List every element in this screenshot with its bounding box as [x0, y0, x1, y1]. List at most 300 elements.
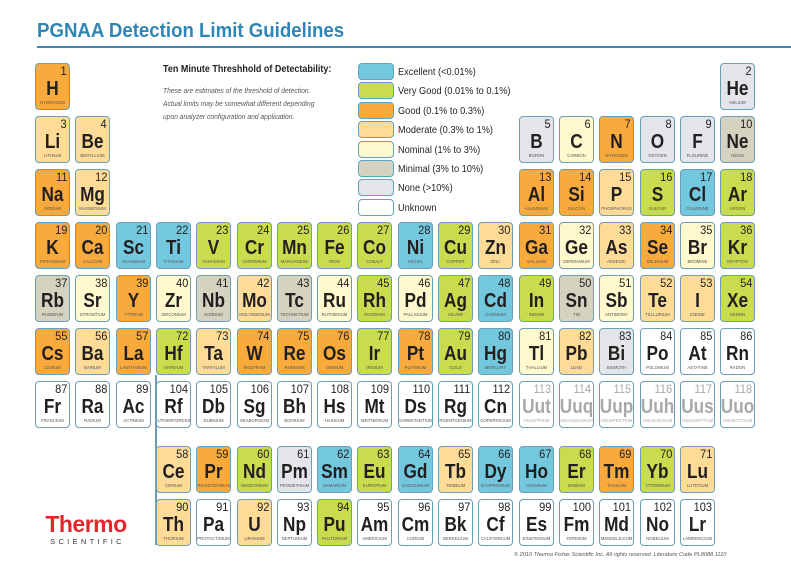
- element: Rg: ROENTGENIUM: [439, 418, 472, 423]
- element: Zn: ZINC: [490, 259, 501, 264]
- element: Ru: [317, 275, 352, 322]
- element: Md: MENDELEVIUM: [601, 536, 632, 541]
- element: Rf: Rf: [164, 396, 183, 418]
- element: Au: Au: [444, 343, 467, 365]
- element: Ac: Ac: [122, 396, 144, 418]
- element: V: [196, 222, 231, 269]
- element: Ce: [156, 446, 191, 493]
- element: Uuh: Uuh: [641, 396, 674, 418]
- element: Ds: Ds: [404, 396, 426, 418]
- element: Lr: Lr: [689, 514, 706, 536]
- element: O: O: [651, 131, 664, 153]
- element: Fr: FRANCIUM: [41, 418, 64, 423]
- element: Pt: 78: [418, 329, 430, 343]
- legend: Excellent (<0.01%): [398, 66, 476, 78]
- element: Te: 52: [660, 276, 672, 290]
- element: Cm: 96: [418, 500, 430, 514]
- element: Rn: Rn: [726, 343, 749, 365]
- element: Uuo: Uuo: [721, 396, 754, 418]
- element: Be: BERYLLIUM: [80, 153, 105, 158]
- element: Mn: MANGANESE: [281, 259, 308, 264]
- element: Ni: Ni: [407, 237, 424, 259]
- element: B: 5: [545, 117, 551, 131]
- element: In: INDIUM: [529, 312, 544, 317]
- element: B: B: [530, 131, 543, 153]
- element: Bi: 83: [619, 329, 631, 343]
- element: Si: Si: [568, 184, 585, 206]
- element: Sm: [317, 446, 352, 493]
- element: Br: 35: [700, 223, 712, 237]
- element: Es: Es: [526, 514, 547, 536]
- element: Lu: [680, 446, 715, 493]
- logo: Thermo Scientific: SCIENTIFIC: [50, 537, 125, 546]
- element: Pt: Pt: [407, 343, 424, 365]
- element: Rh: 45: [377, 276, 389, 290]
- element: H: [35, 63, 70, 110]
- element: Ga: Ga: [525, 237, 548, 259]
- element: Yb: 70: [660, 447, 672, 461]
- element: U: 92: [257, 500, 269, 514]
- element: Zr: 40: [176, 276, 188, 290]
- element: Mt: 109: [371, 382, 389, 396]
- element: Xe: 54: [740, 276, 752, 290]
- element: Si: 14: [579, 170, 591, 184]
- element: Cn: 112: [492, 382, 510, 396]
- element: Mg: MAGNESIUM: [79, 206, 106, 211]
- element: Sr: [75, 275, 110, 322]
- element: La: LANTHANUM: [120, 365, 147, 370]
- element: Hs: [317, 381, 352, 428]
- element: Sg: 106: [251, 382, 269, 396]
- element: Os: OSMIUM: [326, 365, 343, 370]
- element: Ni: [398, 222, 433, 269]
- element: Uus: 117: [694, 382, 712, 396]
- element: Gd: 64: [418, 447, 430, 461]
- element: Y: YTTRIUM: [124, 312, 143, 317]
- legend: [358, 63, 510, 216]
- element: Uup: [599, 381, 634, 428]
- element: Bh: Bh: [283, 396, 306, 418]
- element: Al: [519, 169, 554, 216]
- element: Ho: HOLMIUM: [526, 483, 547, 488]
- element: Uuo: UNUNOCTIUM: [723, 418, 752, 423]
- element: Am: [357, 499, 392, 546]
- element: Rh: Rh: [363, 290, 386, 312]
- element: Cm: CURIUM: [407, 536, 424, 541]
- legend heading: Ten Minute Threshhold of Detectability:: [163, 64, 331, 75]
- element: Es: [519, 499, 554, 546]
- element: Uuh: UNUNHEXIUM: [643, 418, 672, 423]
- element: Er: Er: [567, 461, 586, 483]
- element: Bh: [277, 381, 312, 428]
- element: Yb: Yb: [647, 461, 668, 483]
- element: Nd: Nd: [243, 461, 266, 483]
- element: Eu: [357, 446, 392, 493]
- element: Si: [559, 169, 594, 216]
- element: Be: Be: [81, 131, 103, 153]
- element: Ag: [438, 275, 473, 322]
- element: Tm: THULIUM: [607, 483, 626, 488]
- element: Tl: 81: [539, 329, 551, 343]
- element: La: La: [123, 343, 144, 365]
- element: Co: 27: [377, 223, 389, 237]
- element: Eu: Eu: [364, 461, 385, 483]
- element: Cr: [237, 222, 272, 269]
- element: Au: GOLD: [449, 365, 462, 370]
- element: Cm: Cm: [402, 514, 429, 536]
- element: Bk: Bk: [444, 514, 466, 536]
- element: Ds: DARMSTADTIUM: [398, 418, 433, 423]
- element: Sc: Sc: [123, 237, 144, 259]
- element: Be: 4: [101, 117, 107, 131]
- element: He: He: [726, 78, 748, 100]
- element: K: POTASSIUM: [40, 259, 65, 264]
- element: Nd: NEODYMIUM: [241, 483, 268, 488]
- element: Sc: 21: [136, 223, 148, 237]
- element: At: At: [688, 343, 707, 365]
- element: Ru: RUTHENIUM: [322, 312, 347, 317]
- element: Fe: IRON: [329, 259, 340, 264]
- element: Rh: [357, 275, 392, 322]
- element: Kr: KRYPTON: [727, 259, 748, 264]
- element: Pd: 46: [418, 276, 430, 290]
- element: Np: NEPTUNIUM: [282, 536, 307, 541]
- element: W: [237, 328, 272, 375]
- element: Sc: [116, 222, 151, 269]
- element: Cs: Cs: [41, 343, 63, 365]
- element: Pb: LEAD: [571, 365, 582, 370]
- element: Es: EINSTEINIUM: [523, 536, 550, 541]
- element: Tb: Tb: [445, 461, 466, 483]
- element: S: [640, 169, 675, 216]
- element: Ga: [519, 222, 554, 269]
- element: Pd: PALLADIUM: [403, 312, 428, 317]
- element: U: U: [248, 514, 261, 536]
- element: O: OXYGEN: [648, 153, 667, 158]
- element: Gd: [398, 446, 433, 493]
- element: P: 15: [619, 170, 631, 184]
- legend: Moderate (0.3% to 1%): [398, 124, 493, 136]
- element: Ac: ACTINIUM: [123, 418, 144, 423]
- element: Cf: 98: [498, 500, 510, 514]
- element: Hg: [478, 328, 513, 375]
- element: V: V: [208, 237, 219, 259]
- element: Er: ERBIUM: [568, 483, 585, 488]
- element: Pa: Pa: [203, 514, 224, 536]
- element: La: 57: [136, 329, 148, 343]
- element: Uup: UNUNPENTIUM: [601, 418, 632, 423]
- element: K: K: [46, 237, 59, 259]
- element: N: [599, 116, 634, 163]
- element: Ba: 56: [95, 329, 107, 343]
- element: Np: [277, 499, 312, 546]
- element: Hf: HAFNIUM: [164, 365, 183, 370]
- element: Rg: Rg: [444, 396, 467, 418]
- element: No: [640, 499, 675, 546]
- element: Mt: MEITNERIUM: [361, 418, 388, 423]
- element: Bh: BOHRIUM: [284, 418, 305, 423]
- element: Li: [35, 116, 70, 163]
- element: Se: SELENIUM: [647, 259, 668, 264]
- element: Pb: Pb: [566, 343, 587, 365]
- element: Am: 95: [377, 500, 389, 514]
- element: Am: AMERICIUM: [362, 536, 387, 541]
- title: PGNAA Detection Limit Guidelines: [37, 19, 344, 42]
- element: Ar: [720, 169, 755, 216]
- legend: Unknown: [398, 202, 437, 214]
- element: Cn: Cn: [484, 396, 507, 418]
- element: Hg: 80: [498, 329, 510, 343]
- element: Ca: 20: [95, 223, 107, 237]
- element: Al: ALUMINUM: [525, 206, 548, 211]
- element: S: S: [652, 184, 663, 206]
- element: V: 23: [216, 223, 228, 237]
- element: U: [237, 499, 272, 546]
- element: Bi: [599, 328, 634, 375]
- element: Cm: [398, 499, 433, 546]
- element: Hg: MERCURY: [485, 365, 506, 370]
- element: P: PHOSPHORUS: [601, 206, 632, 211]
- element: Eu: EUROPIUM: [363, 483, 386, 488]
- element: Pm: PROMETHIUM: [280, 483, 309, 488]
- element: O: 8: [666, 117, 672, 131]
- note text: These are estimates of the threshold of detection.: [163, 86, 310, 95]
- element: Li: 3: [61, 117, 67, 131]
- element: I: I: [695, 290, 700, 312]
- element: Fe: 26: [337, 223, 349, 237]
- element: Sb: Sb: [606, 290, 627, 312]
- element: U: URANIUM: [244, 536, 265, 541]
- element: Nb: 41: [216, 276, 228, 290]
- legend: Minimal (3% to 10%): [398, 163, 483, 175]
- element: Md: [599, 499, 634, 546]
- element: Lr: LAWRENCIUM: [683, 536, 712, 541]
- element: Nb: [196, 275, 231, 322]
- element: Tl: [519, 328, 554, 375]
- element: Ni: 28: [418, 223, 430, 237]
- element: Sm: Sm: [321, 461, 348, 483]
- divider line f-block: [155, 375, 156, 545]
- element: Au: 79: [458, 329, 470, 343]
- element: Ar: ARGON: [730, 206, 745, 211]
- element: Sg: Sg: [244, 396, 265, 418]
- element: Pu: 94: [337, 500, 349, 514]
- element: Uut: UNUNTRIUM: [523, 418, 550, 423]
- element: C: [559, 116, 594, 163]
- element: Ba: [75, 328, 110, 375]
- element: I: 53: [700, 276, 712, 290]
- element: Hf: 72: [176, 329, 188, 343]
- element: Sb: [599, 275, 634, 322]
- element: Pb: 82: [579, 329, 591, 343]
- element: Hs: HASSIUM: [325, 418, 344, 423]
- element: Mg: 12: [95, 170, 107, 184]
- element: Ag: SILVER: [448, 312, 463, 317]
- element: N: N: [610, 131, 623, 153]
- element: Co: COBALT: [366, 259, 383, 264]
- element: Fr: 87: [55, 382, 67, 396]
- element: Th: THORIUM: [163, 536, 184, 541]
- element: Uus: [680, 381, 715, 428]
- element: Y: Y: [128, 290, 139, 312]
- element: Ne: 10: [740, 117, 752, 131]
- element: Uut: [519, 381, 554, 428]
- element: In: [519, 275, 554, 322]
- element: Y: 39: [136, 276, 148, 290]
- element: Uuq: 114: [573, 382, 591, 396]
- element: Pu: Pu: [324, 514, 345, 536]
- element: Zn: 30: [498, 223, 510, 237]
- element: Rg: [438, 381, 473, 428]
- element: Ne: NEON: [731, 153, 744, 158]
- element: Mg: [75, 169, 110, 216]
- element: Db: 105: [210, 382, 228, 396]
- element: Np: 93: [297, 500, 309, 514]
- element: Th: [156, 499, 191, 546]
- element: He: HELIUM: [729, 100, 746, 105]
- element: Te: [640, 275, 675, 322]
- element: Zn: [478, 222, 513, 269]
- element: Ho: [519, 446, 554, 493]
- element: Cs: 55: [55, 329, 67, 343]
- element: Mn: [277, 222, 312, 269]
- element: Li: Li: [45, 131, 60, 153]
- element: Ir: IRIDIUM: [366, 365, 383, 370]
- element: Ra: Ra: [81, 396, 103, 418]
- element: Ag: 47: [458, 276, 470, 290]
- element: Fm: [559, 499, 594, 546]
- element: Kr: 36: [740, 223, 752, 237]
- element: Ca: CALCIUM: [83, 259, 102, 264]
- element: Kr: Kr: [728, 237, 747, 259]
- element: Po: 84: [660, 329, 672, 343]
- element: Pt: PLATINUM: [405, 365, 426, 370]
- element: W: 74: [257, 329, 269, 343]
- element: Mn: Mn: [282, 237, 307, 259]
- element: Mo: MOLYBDENUM: [239, 312, 270, 317]
- element: Pr: 59: [216, 447, 228, 461]
- element: Nb: Nb: [202, 290, 225, 312]
- element: Cd: CADMIUM: [485, 312, 506, 317]
- element: Es: 99: [539, 500, 551, 514]
- element: Pd: [398, 275, 433, 322]
- element: Fe: [317, 222, 352, 269]
- element: Sn: Sn: [566, 290, 587, 312]
- element: Rb: 37: [55, 276, 67, 290]
- element: Yb: [640, 446, 675, 493]
- element: Np: Np: [283, 514, 306, 536]
- element: Ir: 77: [377, 329, 389, 343]
- element: Re: RHENIUM: [284, 365, 305, 370]
- element: Sr: STRONTIUM: [80, 312, 105, 317]
- element: Ca: [75, 222, 110, 269]
- element: Mg: Mg: [80, 184, 105, 206]
- element: Fr: Fr: [44, 396, 61, 418]
- element: At: ASTATINE: [687, 365, 708, 370]
- element: Uus: Uus: [681, 396, 714, 418]
- element: N: 7: [625, 117, 631, 131]
- note text: [162, 86, 314, 121]
- element: Pa: PROTACTINIUM: [197, 536, 230, 541]
- element: I: IODINE: [690, 312, 705, 317]
- element: Li: LITHIUM: [44, 153, 61, 158]
- element: Cn: [478, 381, 513, 428]
- element: Rn: [720, 328, 755, 375]
- element: S: 16: [660, 170, 672, 184]
- element: Sn: 50: [579, 276, 591, 290]
- element: Cr: 24: [257, 223, 269, 237]
- element: Si: SILICON: [568, 206, 585, 211]
- element: Lr: 103: [694, 500, 712, 514]
- element: Ir: Ir: [369, 343, 380, 365]
- legend: None (>10%): [398, 182, 453, 194]
- element: Pu: [317, 499, 352, 546]
- element: Re: Re: [283, 343, 305, 365]
- element: Ra: RADIUM: [84, 418, 101, 423]
- element: Cr: CHROMIUM: [242, 259, 267, 264]
- element: No: NOBELIUM: [646, 536, 669, 541]
- element: Rf: 104: [170, 382, 188, 396]
- element: Tm: [599, 446, 634, 493]
- element: Ge: 32: [579, 223, 591, 237]
- element: Cd: Cd: [484, 290, 507, 312]
- element: Po: POLONIUM: [646, 365, 669, 370]
- element: Cl: [680, 169, 715, 216]
- element: H: 1: [61, 64, 67, 78]
- element: Cd: 48: [498, 276, 510, 290]
- element: Fm: 100: [573, 500, 591, 514]
- element: Se: Se: [647, 237, 668, 259]
- element: P: [599, 169, 634, 216]
- element: Ag: Ag: [444, 290, 467, 312]
- element: I: [680, 275, 715, 322]
- element: Mn: 25: [297, 223, 309, 237]
- element: Db: DUBNIUM: [203, 418, 224, 423]
- element: Uuq: [559, 381, 594, 428]
- element: Ba: Ba: [81, 343, 103, 365]
- element: N: NITROGEN: [605, 153, 628, 158]
- element: Cl: Cl: [689, 184, 706, 206]
- element: Ra: [75, 381, 110, 428]
- element: Th: 90: [176, 500, 188, 514]
- element: F: F: [692, 131, 703, 153]
- element: No: 102: [654, 500, 672, 514]
- element: He: 2: [746, 64, 752, 78]
- element: C: CARBON: [567, 153, 586, 158]
- element: Hg: Hg: [484, 343, 507, 365]
- element: La: [116, 328, 151, 375]
- element: Mo: [237, 275, 272, 322]
- element: Cf: CALIFORNIUM: [481, 536, 510, 541]
- element: Uus: UNUNSEPTIUM: [682, 418, 713, 423]
- element: At: 85: [700, 329, 712, 343]
- element: Er: [559, 446, 594, 493]
- element: Lu: Lu: [687, 461, 708, 483]
- element: Ga: 31: [539, 223, 551, 237]
- element: Ar: 18: [740, 170, 752, 184]
- element: Al: Al: [528, 184, 545, 206]
- element: Sg: SEABORGIUM: [240, 418, 269, 423]
- element: Rn: RADON: [730, 365, 745, 370]
- element: Ar: Ar: [728, 184, 747, 206]
- logo: Thermo Scientific: Thermo: [45, 511, 127, 537]
- element: Rf: [156, 381, 191, 428]
- element: Te: Te: [648, 290, 667, 312]
- element: Tc: 43: [297, 276, 309, 290]
- element: Sn: [559, 275, 594, 322]
- element: Tb: TERBIUM: [446, 483, 465, 488]
- element: Rh: RHODIUM: [364, 312, 385, 317]
